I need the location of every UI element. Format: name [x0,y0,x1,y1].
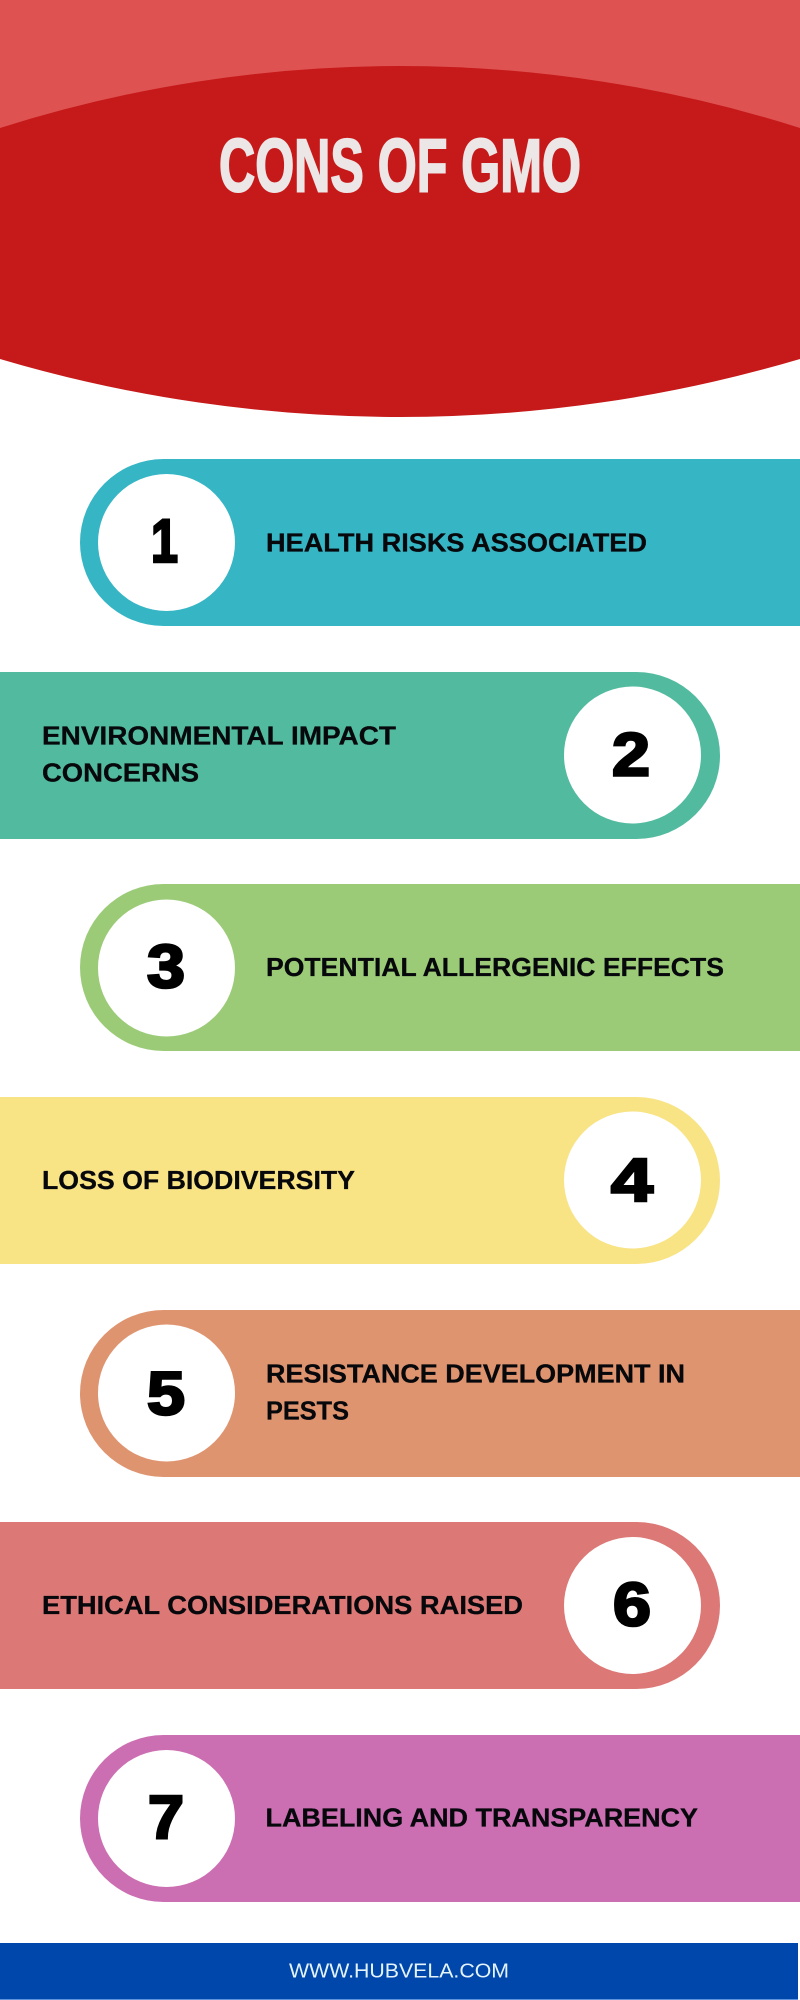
item 2: environmental impact: ENVIRONMENTAL IMPACT [42,720,396,750]
item 7: labeling: 7 [148,1784,184,1852]
item 2: environmental impact: CONCERNS [42,758,199,788]
item 4: biodiversity [0,1097,720,1264]
item 5: pest resistance: 5 [147,1360,185,1428]
item 4: biodiversity: 4 [611,1146,653,1214]
item 6: ethical considerations [0,1522,720,1689]
item 1: health risks: 1 [151,507,178,575]
item 3: allergenic effects: POTENTIAL ALLERGENIC EFFECTS [266,952,724,982]
item 6: ethical considerations: 6 [613,1570,651,1638]
item 5: pest resistance [80,1310,800,1477]
item 6: ethical considerations: ETHICAL CONSIDERATIONS RAISED [42,1590,523,1620]
item 1: health risks: HEALTH RISKS ASSOCIATED [266,528,647,558]
item 2: environmental impact [0,672,720,839]
item 5: pest resistance: RESISTANCE DEVELOPMENT IN [266,1358,685,1388]
header banner [0,0,800,417]
footer bar [0,1943,798,2000]
item 3: allergenic effects: 3 [147,932,185,1000]
item 7: labeling: LABELING AND TRANSPARENCY [266,1802,698,1832]
title: CONS OF GMO [219,124,581,208]
item 4: biodiversity: LOSS OF BIODIVERSITY [42,1165,355,1195]
footer url: WWW.HUBVELA.COM [289,1960,509,1982]
item 2: environmental impact: 2 [612,720,650,788]
item 3: allergenic effects [80,884,800,1051]
item 1: health risks [80,459,800,626]
item 7: labeling [80,1735,800,1902]
item 5: pest resistance: PESTS [266,1396,349,1426]
